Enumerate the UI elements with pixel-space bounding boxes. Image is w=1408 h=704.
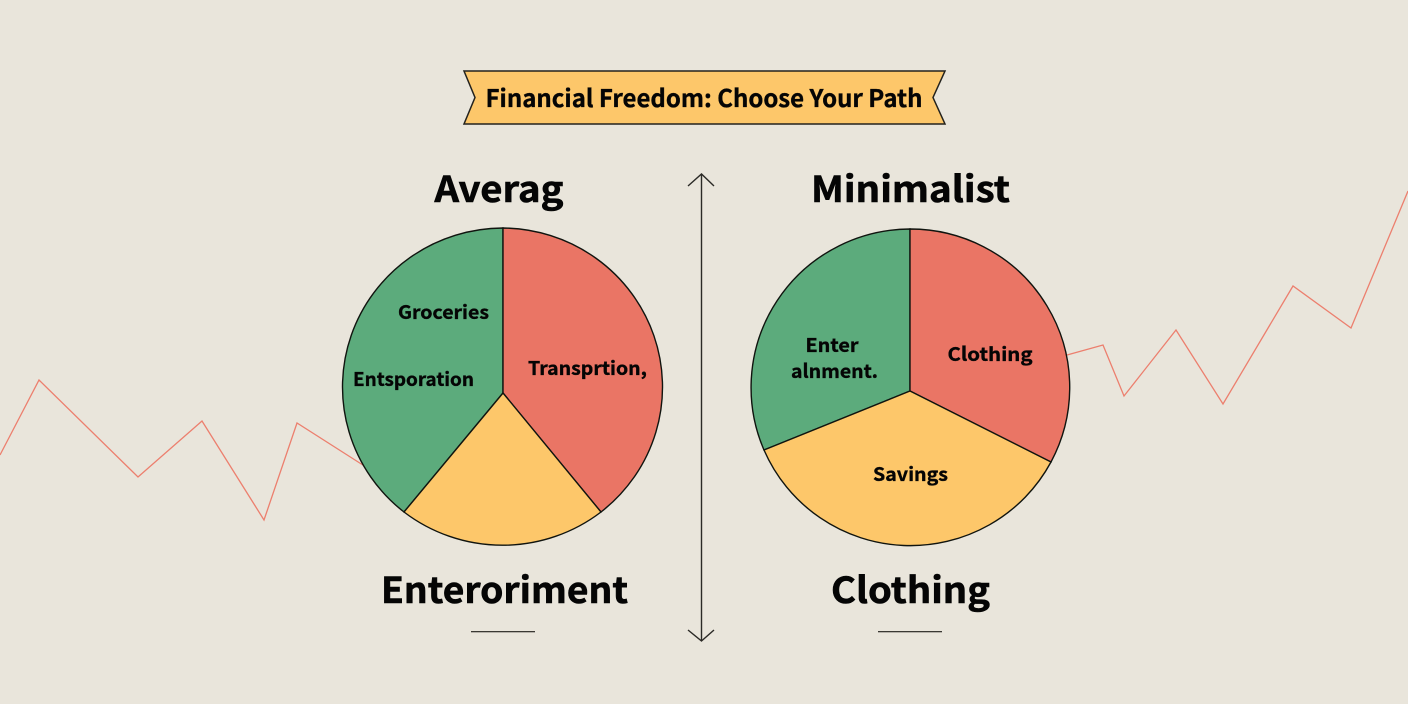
- title banner: Financial Freedom: Choose Your Path: [486, 80, 922, 115]
- label: savings: Savings: [873, 460, 948, 487]
- slice: yellow: [404, 393, 601, 545]
- label: alnment: alnment.: [791, 357, 878, 384]
- label: enter: Enter: [806, 331, 859, 358]
- heading: average: Averag: [433, 161, 564, 213]
- pie chart: average: [342, 228, 663, 545]
- slice: yellow: [764, 391, 1051, 546]
- underline: left: [471, 631, 535, 632]
- pie chart: minimalist: [751, 229, 1070, 546]
- title banner: [464, 71, 945, 124]
- underline: right: [878, 631, 942, 632]
- trend line: right background: [1067, 191, 1408, 404]
- label: entsporation: Entsporation: [353, 365, 474, 392]
- trend line: left background: [0, 380, 366, 520]
- label: clothing: Clothing: [948, 340, 1033, 367]
- slice: green: [751, 229, 910, 450]
- heading: minimalist: Minimalist: [811, 161, 1010, 213]
- caption: clothing: Clothing: [831, 562, 990, 614]
- slice: red: [503, 228, 663, 512]
- slice: green: [342, 228, 503, 512]
- label: transportion: Transprtion,: [528, 354, 647, 381]
- label: groceries: Groceries: [398, 298, 489, 325]
- slice: red: [910, 229, 1070, 462]
- caption: enteroriment: Enteroriment: [381, 562, 628, 614]
- double arrow divider: [688, 174, 714, 641]
